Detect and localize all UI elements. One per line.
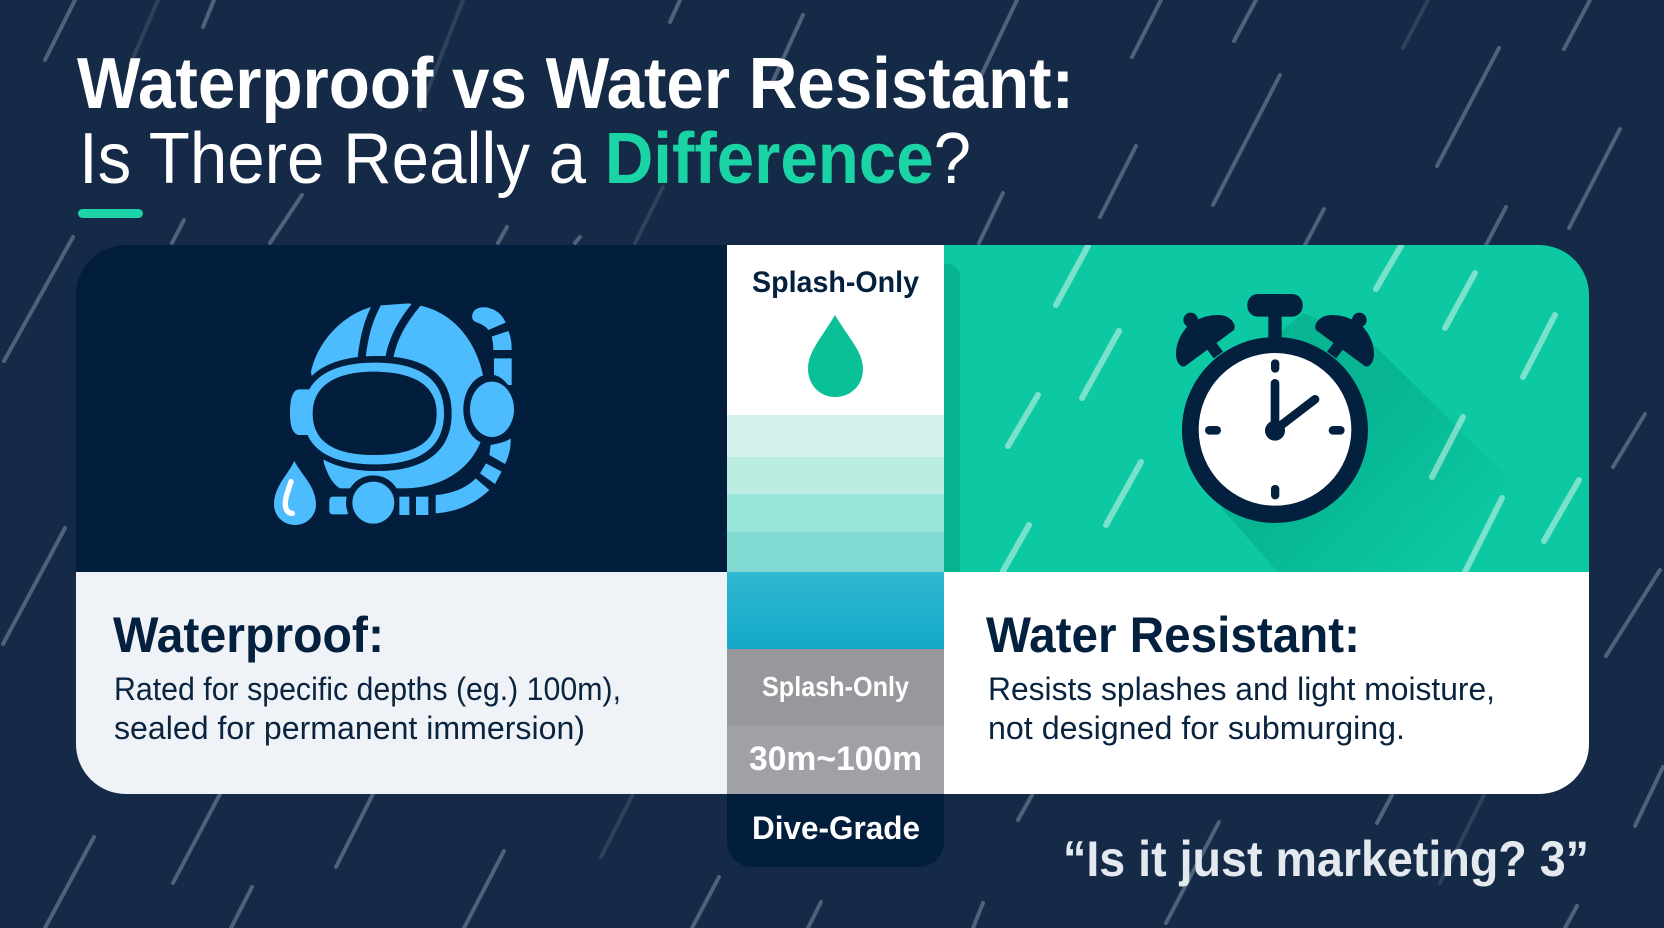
- icon: stopwatch: [1176, 294, 1374, 523]
- label: 30m~100m: 30m~100m: [749, 740, 922, 778]
- column segment: splash white top: [727, 245, 944, 415]
- column band: dive grade: [727, 794, 944, 867]
- quote callout: “Is it just marketing? 3”: [1063, 831, 1589, 887]
- column band: grey splash-only: [727, 649, 944, 725]
- title accent bar: [78, 209, 143, 218]
- heading: waterproof: Waterproof:: [113, 607, 384, 663]
- text: water resistant description: not designed for submurging.: [988, 710, 1405, 746]
- text: waterproof description: sealed for permanent immersion): [114, 710, 585, 746]
- text: waterproof description: Rated for specific depths (eg.) 100m),: [114, 671, 621, 707]
- icon: teal water drop: [808, 315, 863, 397]
- column band: cyan: [727, 572, 944, 649]
- text: waterproof description: [114, 671, 621, 746]
- panel: comparison card: [76, 245, 1640, 794]
- column band: pale teal gradient: [727, 415, 944, 572]
- text: water resistant description: Resists splashes and light moisture,: [988, 671, 1495, 707]
- icon: stopwatch background rain: [944, 246, 1640, 572]
- title: Is There Really a Difference?: [79, 119, 971, 199]
- icon: diving helmet: [274, 303, 515, 530]
- chart: depth rating column: [727, 245, 944, 867]
- heading: water resistant: Water Resistant:: [986, 607, 1360, 663]
- text: water resistant description: [988, 671, 1495, 746]
- label: dive-grade: Dive-Grade: [752, 810, 920, 846]
- panel: water resistant icon background: [944, 245, 1589, 572]
- title: [77, 44, 1074, 199]
- title: Waterproof vs Water Resistant:: [77, 44, 1074, 124]
- panel: water resistant text background: [944, 572, 1589, 794]
- column band: grey depth: [727, 725, 944, 794]
- label: splash-only top: Splash-Only: [752, 266, 919, 299]
- panel: waterproof text background: [76, 572, 727, 794]
- panel: waterproof icon background: [76, 245, 727, 572]
- label: splash-only grey: Splash-Only: [762, 671, 909, 702]
